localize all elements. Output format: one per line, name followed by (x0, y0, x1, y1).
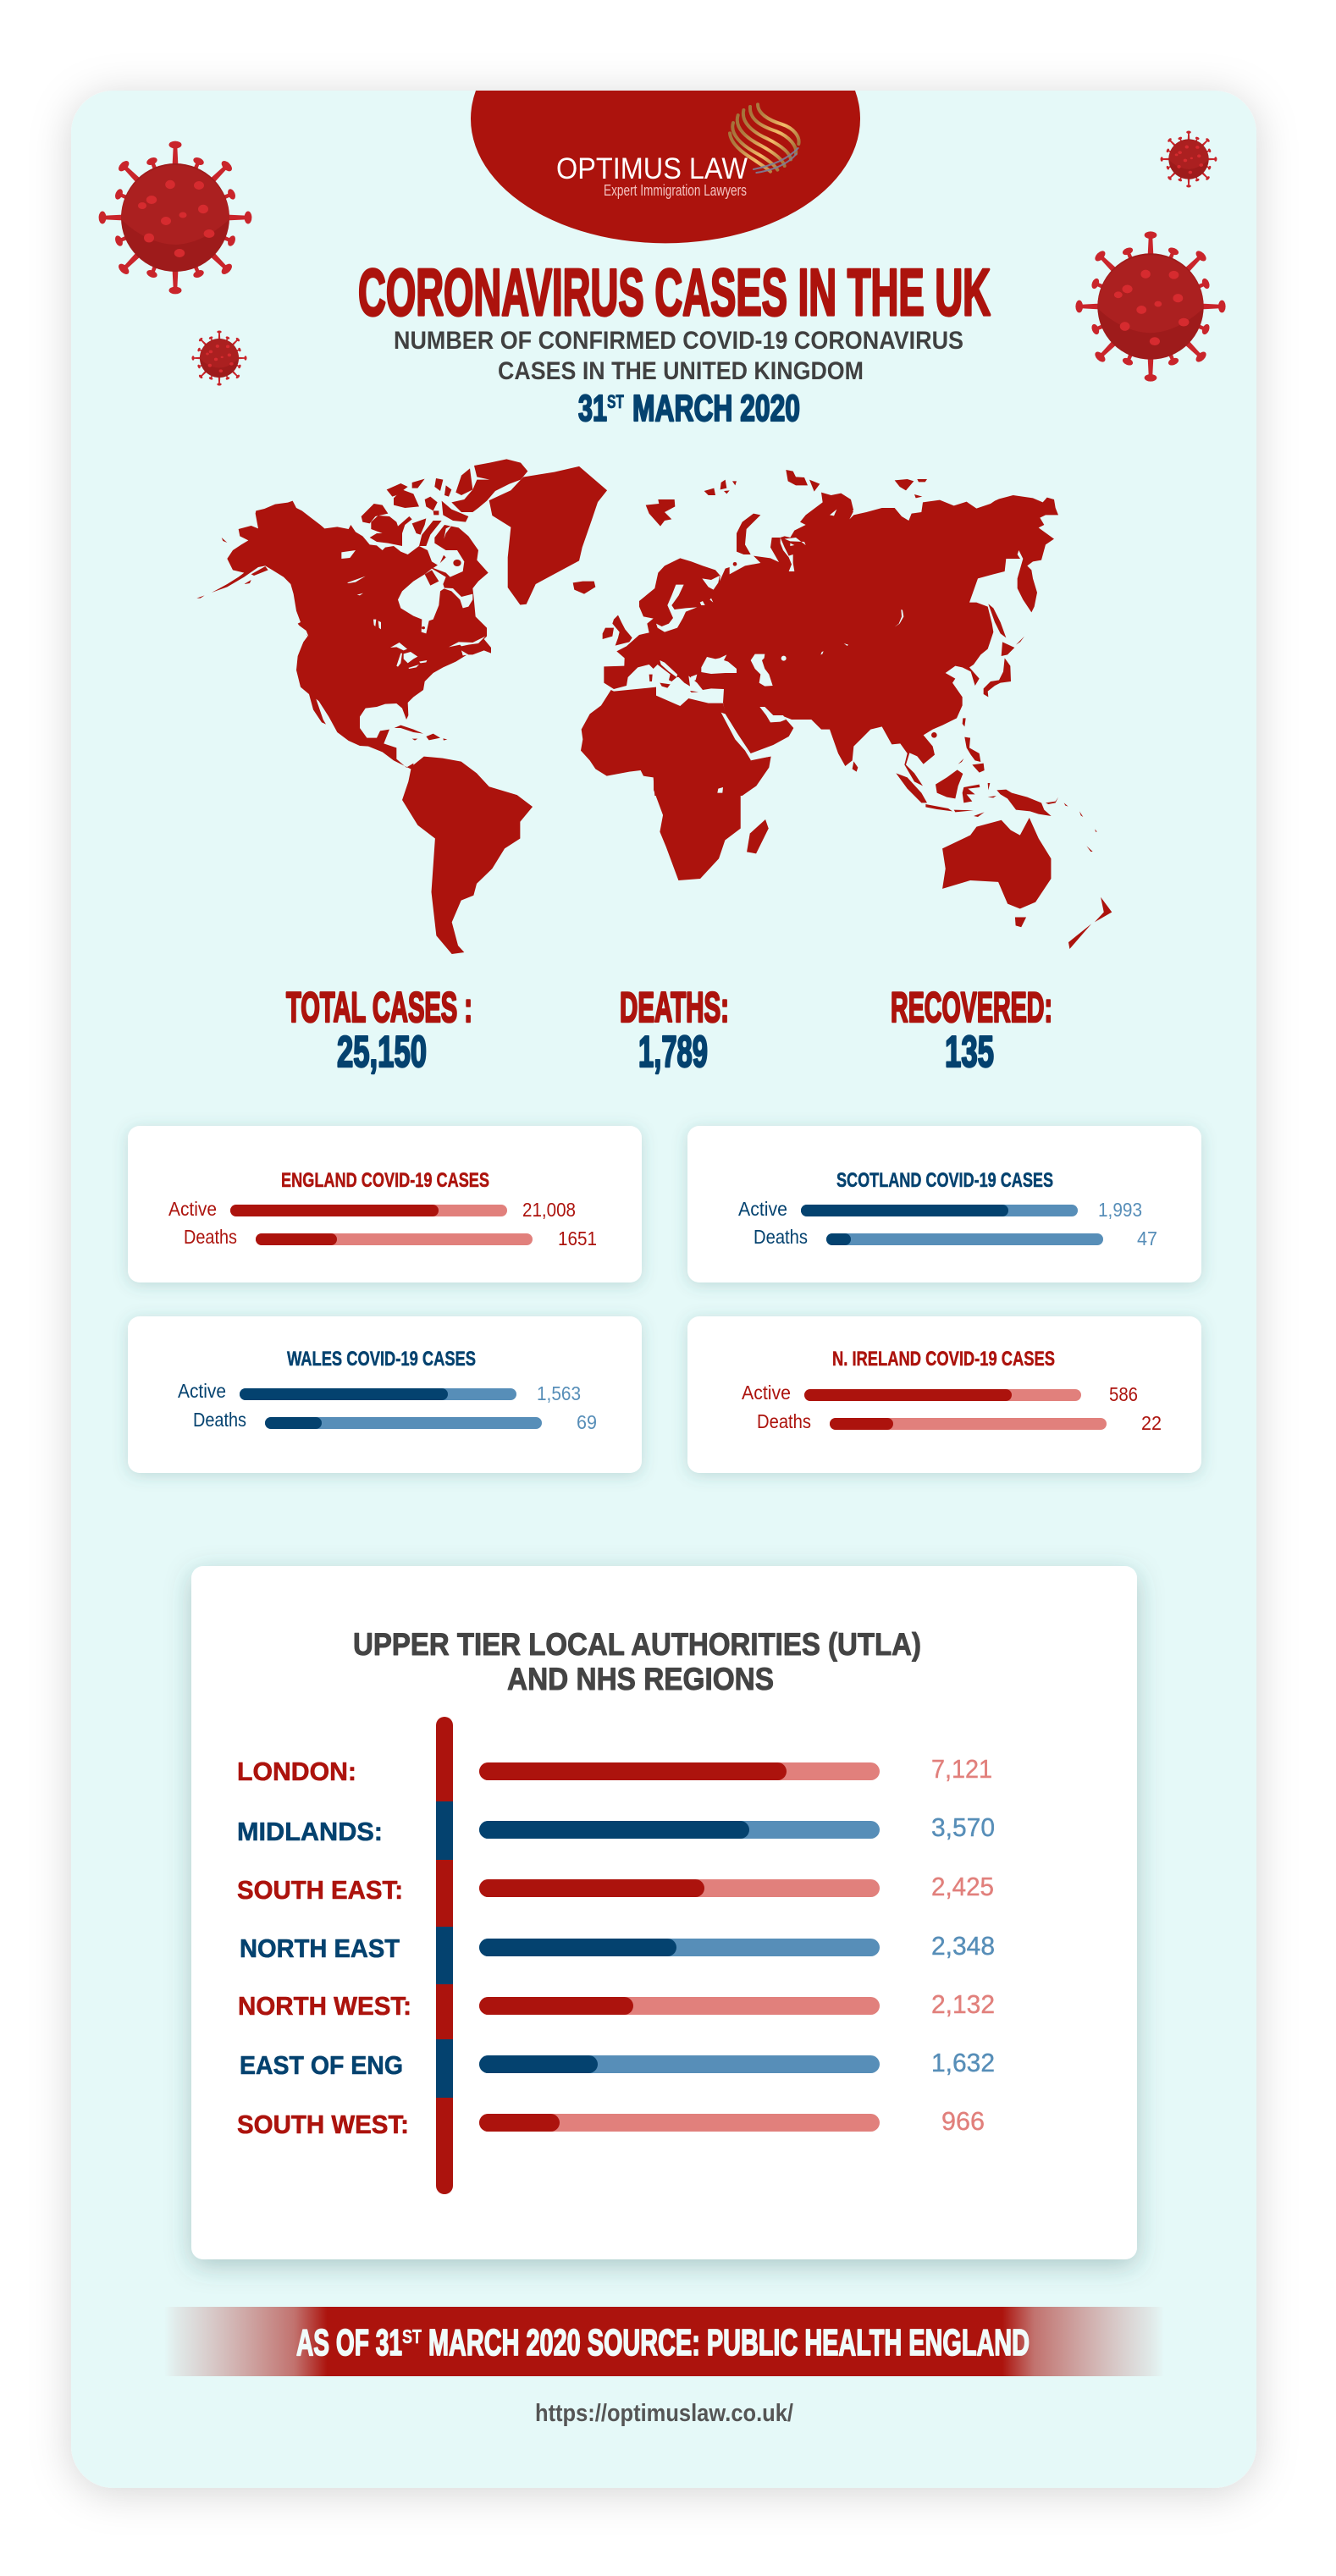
panel: Scotland cases (687, 1126, 1201, 1282)
date: 31 (578, 388, 607, 429)
date (578, 388, 800, 429)
stat: recovered: RECOVERED: (891, 984, 1052, 1031)
Northern Ireland active row: Active (742, 1382, 791, 1404)
Northern Ireland active row: 586 (1109, 1383, 1138, 1405)
row: North West (238, 1989, 995, 2021)
row: North East: NORTH EAST (240, 1933, 400, 1963)
source banner: AS OF 31 (296, 2322, 402, 2364)
logo wordmark: OPTIMUS LAW (556, 152, 748, 185)
Wales active row: 1,563 (537, 1382, 581, 1404)
stat: deaths: 1,789 (638, 1028, 708, 1077)
row: South East (237, 1872, 994, 1905)
row: London: LONDON: (237, 1757, 356, 1786)
Wales heading: WALES COVID-19 CASES (287, 1348, 476, 1371)
map: East Asia and Pacific islands (853, 479, 1097, 852)
England active row: Active (168, 1198, 217, 1220)
subtitle: NUMBER OF CONFIRMED COVID-19 CORONAVIRUS (394, 327, 963, 355)
stat: total cases: TOTAL CASES : (286, 984, 472, 1031)
Scotland deaths row: Deaths (754, 1226, 808, 1248)
row: South West: 966 (941, 2106, 985, 2136)
England deaths row (184, 1226, 597, 1249)
date: ST (607, 391, 624, 412)
icon: virus right (1075, 231, 1226, 382)
panel: Wales cases (128, 1316, 642, 1473)
Wales active row: Active (178, 1380, 226, 1402)
row: South West: SOUTH WEST: (237, 2110, 409, 2139)
icon: gold swoosh logo mark (730, 104, 799, 173)
UTLA heading: AND NHS REGIONS (507, 1662, 774, 1696)
Wales deaths row: 69 (577, 1411, 597, 1433)
row: East of England: 1,632 (931, 2048, 995, 2077)
row: Midlands: MIDLANDS: (237, 1817, 383, 1846)
row: North East: 2,348 (931, 1931, 995, 1961)
Scotland deaths row: 47 (1137, 1227, 1157, 1249)
map: North America (196, 459, 527, 770)
England active row (168, 1198, 576, 1221)
Northern Ireland deaths row (757, 1410, 1162, 1434)
stat: total cases (286, 984, 472, 1077)
logo badge (471, 91, 860, 243)
panel: England cases (128, 1126, 642, 1282)
icon: small virus left (191, 330, 247, 386)
subtitle (394, 327, 963, 385)
Northern Ireland deaths row: 22 (1141, 1412, 1162, 1434)
row: South East: 2,425 (931, 1872, 994, 1901)
Wales deaths row (193, 1409, 597, 1433)
row: North West: NORTH WEST: (238, 1991, 411, 2021)
panel: UTLA and NHS regions (191, 1566, 1137, 2259)
world map (196, 459, 1112, 954)
logo tagline: Expert Immigration Lawyers (604, 182, 747, 199)
England heading: ENGLAND COVID-19 CASES (281, 1169, 489, 1192)
England deaths row: Deaths (184, 1226, 237, 1248)
England deaths row: 1651 (558, 1227, 597, 1249)
Northern Ireland heading: N. IRELAND COVID-19 CASES (832, 1348, 1055, 1371)
stat: deaths (620, 984, 729, 1077)
stat: recovered (891, 984, 1052, 1077)
panel: Northern Ireland cases (687, 1316, 1201, 1473)
row: East of England (240, 2048, 995, 2080)
Wales deaths row: Deaths (193, 1409, 246, 1431)
England active row: 21,008 (522, 1199, 576, 1221)
row: London: 7,121 (931, 1754, 992, 1784)
Northern Ireland deaths row: Deaths (757, 1410, 811, 1432)
row: South East: SOUTH EAST: (237, 1875, 403, 1905)
Scotland active row: Active (738, 1198, 787, 1220)
icon: small virus top right (1161, 131, 1217, 187)
Scotland active row: 1,993 (1098, 1199, 1142, 1221)
UTLA heading (353, 1627, 921, 1696)
subtitle: CASES IN THE UNITED KINGDOM (498, 357, 864, 385)
map: southern landmasses (402, 466, 1112, 954)
stat: deaths: DEATHS: (620, 984, 729, 1031)
date: MARCH 2020 (632, 388, 800, 429)
source banner: MARCH 2020 SOURCE: PUBLIC HEALTH ENGLAND (428, 2322, 1030, 2364)
Scotland deaths row (754, 1226, 1157, 1249)
row: Midlands: 3,570 (931, 1812, 995, 1842)
icon: virus top left (99, 141, 251, 294)
Scotland active row (738, 1198, 1142, 1221)
row: London (237, 1754, 992, 1786)
source banner: ST (402, 2325, 422, 2347)
row: East of England: EAST OF ENG (240, 2050, 403, 2080)
Wales active row (178, 1380, 581, 1404)
row: North West: 2,132 (931, 1989, 995, 2019)
website url: https://optimuslaw.co.uk/ (535, 2400, 793, 2427)
Scotland heading: SCOTLAND COVID-19 CASES (836, 1169, 1053, 1192)
vertical axis spine (436, 1717, 453, 2194)
UTLA heading: UPPER TIER LOCAL AUTHORITIES (UTLA) (353, 1627, 921, 1662)
source banner (164, 2307, 1164, 2376)
Northern Ireland active row (742, 1382, 1138, 1405)
stat: total cases: 25,150 (337, 1028, 427, 1077)
row: Midlands (237, 1812, 995, 1846)
row: North East (240, 1931, 995, 1963)
map: Africa north and Eurasia (573, 470, 1058, 796)
row: South West (237, 2106, 985, 2139)
stat: recovered: 135 (945, 1028, 994, 1077)
